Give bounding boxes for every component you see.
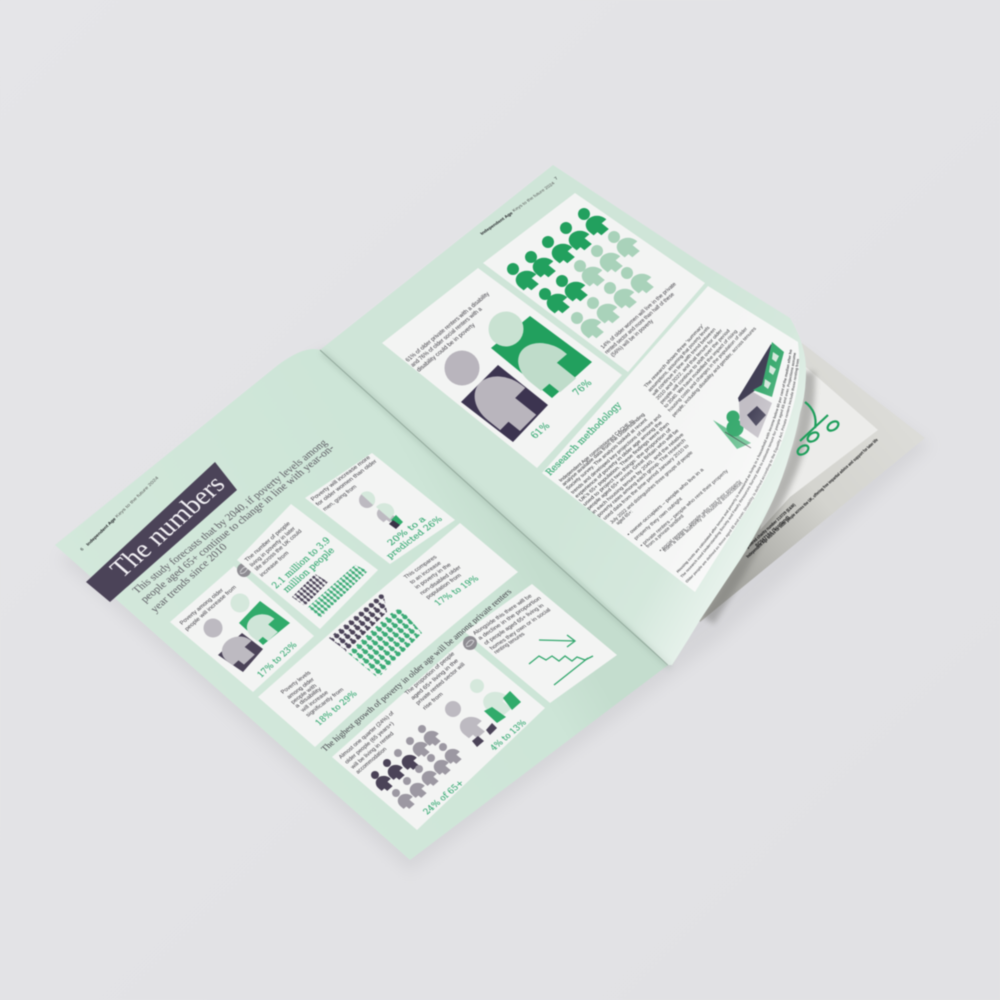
text block: 14% of older women will live in the private [600,282,678,350]
text block: right: in poverty in the [414,563,453,590]
stat: 17% to 19% [433,574,482,608]
text lines on back page: Registered charity number 210729 (E&W) [741,502,797,553]
panel: people in poverty millions [237,504,378,629]
body text: methodology: analyse available data from the Understanding [561,412,647,487]
text block: right: population from [425,573,463,600]
pictogram: light green people [571,231,658,341]
panel: disability poverty [258,523,518,747]
text block: renting tenures [493,632,527,655]
text block: proportion [404,652,467,711]
icon: light green person on green block [488,312,592,399]
heading: Research methodology [544,400,624,478]
icon: grey person on dark block [444,350,548,442]
back page under the curl [690,343,925,622]
intro text: people aged 65+ continue to change in line with year-on- [138,443,337,605]
stat: 4% to 13% [489,718,529,753]
body text: methodology: experience of poverty in older age among the [574,420,664,499]
body text: second column: people, including disability and gender, across tenures [671,326,758,418]
body text: second column: 2010 and 2022, and that tenure for older [655,328,724,401]
footnotes along the page curl: The research used Understanding Society and Family Resources Survey data to estimate tenure for people aged 65 and over. Projections assume that existing trends continue and do not take account of future changes in government policy or wider economic conditions, including housing benefit changes and pension rates. Sample sizes for some groups are small and so estimates should be treated with some caution. Please see the technical report for details of the full methodology used. [680,352,796,578]
subheading: The highest growth of poverty in older age will be among private renters [319,587,514,753]
stat: 18% to 29% [314,689,360,728]
icon: grey person with dark bar [204,618,263,672]
text block: proportion: private rented sector will [415,662,467,706]
text block: Alongside this there will be [472,594,534,636]
body text: methodology: people aged 65+ across Great Britain who will be [586,428,681,511]
text block: proportion: aged 65+ living in the [410,658,460,701]
body text: methodology: July 2022 and distinguishes three groups of people [609,450,695,525]
icon: light person with green bar [230,594,290,646]
pictogram grid: 29% green [348,608,422,678]
pictogram grid: 3.9 million [307,565,368,618]
intro text: year trends since 2010 [148,541,230,615]
body text: second column: people will continue to shift over the period [659,328,732,405]
text block: increase from [259,551,291,578]
header: right page running head: Independent Age [479,210,514,236]
text block: proportion: The proportion of people [404,652,456,696]
text block: rented accommodation: Almost one quarter (24%) of [338,711,396,760]
title banner: The numbers: The numbers [104,470,231,583]
body text: methodology: Independent Age commissioned CACHE to [558,419,636,483]
icon: green person [470,679,521,723]
text block: left: will increase [299,690,330,714]
panel: older women private rented [483,193,705,372]
icon: split person [359,491,403,529]
text block: Poverty among older [179,588,225,626]
illustration: house and trees [713,342,784,449]
text block: right: This compares [403,555,439,580]
icon: arrow badge [237,563,251,577]
bullet list: tenures: property they own outright [633,496,684,541]
text block: 61% of older private renters with a disability [404,291,492,363]
text lines on back page: Independent Age works for older people across the UK, offering free impartial advice and support for later life [745,437,879,559]
panel: women vs men poverty [305,453,455,564]
icon: arrow badge [463,636,477,650]
intro text: This study forecasts that by 2040, if poverty levels among [130,437,330,596]
footnotes along the page curl: Housing costs are calculated after tenure and poverty is measured as living in a household with income below 60 per cent of the median after housing costs. Figures shown are forecasts for 2040 based on trends seen since 2010 and should be read as an indication of the likely direction of poverty among older people. Percentages are rounded to the nearest whole number throughout this report. More details on the data sources and analysis are available in the full technical report. [676,349,792,574]
body text: methodology: poverty rates among each group. The research [596,438,688,518]
stat: 24% of 65+ [422,779,466,817]
body text: methodology: trends and developed key projections of tenure and [570,414,663,495]
stat: predicted 26% [385,515,445,561]
pictogram grid: 18% dark [329,592,387,652]
bullet list: tenures: • owner-occupiers – people who live in a [626,467,706,537]
header: left page running head [79,475,160,552]
header: right page running head [479,176,559,236]
text lines on back page [741,437,879,559]
body text: second column: assumptions, assuming that poverty levels [647,325,712,393]
panel: poverty among older people [170,566,314,692]
bullet list: tenures [626,467,745,553]
stat: 20% to a [386,515,429,548]
body text: second column: housing costs and changes in the population of older [667,326,749,413]
text block: proportion: rise from [422,692,445,711]
stat: 76%: 76% [570,378,595,398]
text block: of people aged 65+ living in [483,603,546,646]
body text: methodology: used to project two things: the proportion of [582,427,673,507]
text block: life across the UK could [254,529,303,572]
body text: methodology: used data from the time period January 2010 to [602,444,691,521]
header: left page running head: Keys to the future 2024 [114,475,160,519]
left page [55,349,668,860]
icon: green tree on back page [796,402,840,457]
text block: left: among older [286,677,316,700]
text block: (56%) will be in poverty [610,319,655,358]
body text: methodology: in each housing tenure by 2040, and the relative [591,432,686,515]
body text: methodology: aged 65+: [615,509,635,526]
right page with curl [320,165,806,667]
light sheen on the page curl [553,165,806,665]
text block: right: to an increase [409,561,443,585]
text block: rented accommodation: will be living in rented [349,731,396,771]
text block: left: people with [290,683,318,705]
text block: left: a disability [294,687,323,709]
text lines on back page: SC047184 (Scotland) [754,515,791,548]
text block: men, going from [322,484,359,512]
panel: private rented [332,640,545,830]
text block: rented accommodation: older people (65 years+) [344,721,396,765]
text block: right [403,555,463,600]
text block [472,594,552,655]
icon: stairs and arrow [529,635,593,685]
panel: renters with a disability [382,268,622,468]
text block: Poverty will increase more [310,455,372,502]
body text: second column: will continue in line with trend between [651,327,718,397]
bullet list: tenures: • private renters – people who rent their property [639,468,730,548]
body text: methodology: UK's 65+ population. These findings were then [578,422,671,503]
text block: people will increase from [184,585,238,632]
header: right page running head: Keys to the future 2024 [511,181,556,213]
panel: research methodology [542,286,800,592]
text block [244,521,303,578]
body text: methodology: Society survey. The analysis looked at recent [565,417,649,491]
bullet list: tenures: from a private landlord [645,514,686,549]
pictogram: dark green people [507,208,613,316]
text block: rented sector and more than half of these [604,292,676,355]
body text: methodology [558,412,695,526]
stat: 17% to 23% [256,640,300,680]
icon: grey person [445,701,497,747]
text block: for older women than older [315,459,379,507]
text block: living in poverty in later [249,526,297,568]
pictogram grid: 2.1 million [292,574,328,606]
text block: homes they own or in social [489,608,552,651]
header: left page running head: Independent Age [85,516,117,547]
header: left page running head: 6 [79,546,85,552]
panel: social renting decline [465,584,617,703]
stat: 2.1 million to 3.9 [270,536,333,591]
text block: The number of people [244,521,292,563]
header: right page running head: 7 [553,176,559,181]
footnotes along the page curl [676,349,800,583]
body text: second column: to 2040. We have modelled the impact of rising [663,329,739,409]
pictogram: 24 percent of 65+ [371,725,465,811]
bullet list: tenures: from a local authority or housing association [662,481,745,553]
text block: right: non-disabled older [419,565,463,596]
text block: left: significantly from [305,687,346,718]
footnotes along the page curl: Older people are defined as those aged 65 and over. Disability is defined according to the Equality Act. Private renters include those renting from a private landlord or letting agent and social renters include those renting from a local authority or housing association, with any further detail on the groupings and analysis given in the methodology section of the main report and in its annexes, which are available on our website for anyone who wishes to read them. [685,358,800,583]
text block: and 76% of older social renters with a [409,306,484,368]
bullet list: tenures: • social renters – people who rent their property [658,479,743,553]
text block: disability could be in poverty [415,322,477,373]
body text: second column: The research shows three 'summary' [643,323,705,389]
text block: a decline in the proportion [477,596,543,641]
text block: rented accommodation: accommodation [355,747,388,775]
text block: left [280,670,346,718]
stat: million people [281,546,337,595]
stat: 61%: 61% [528,421,553,441]
text block: left: Poverty levels [280,670,313,695]
